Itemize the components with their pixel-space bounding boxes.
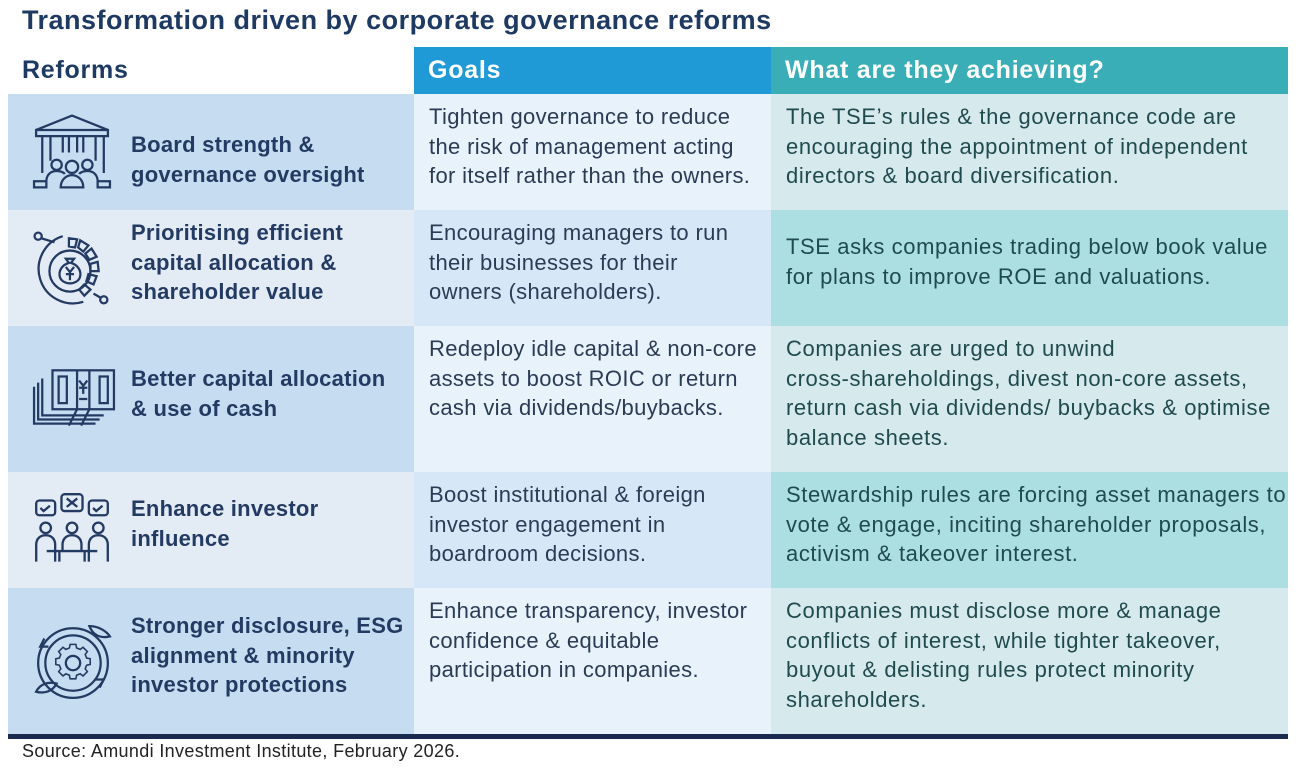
row 4 goals [414, 472, 771, 588]
icon: banknotes [32, 369, 116, 426]
row 1 reform: Board strength & [131, 132, 315, 157]
row 1 goals: Tighten governance to reduce [429, 104, 730, 129]
row 4 achieving: Stewardship rules are forcing asset managers to [786, 482, 1286, 507]
row 1 goals [414, 94, 771, 210]
row 4 reform [8, 472, 414, 588]
row 3 achieving: cross-shareholdings, divest non-core assets, [786, 366, 1248, 390]
header: achieving [771, 47, 1288, 94]
row 3 achieving [771, 326, 1288, 472]
header: achieving: What are they achieving? [785, 56, 1104, 84]
row 3 reform [8, 326, 414, 472]
row 3 achieving: Companies are urged to unwind [786, 336, 1115, 361]
row 4 reform: Enhance investor [131, 496, 318, 521]
row 3 achieving: balance sheets. [786, 424, 949, 450]
row 4 goals: investor engagement in [429, 512, 665, 536]
row 1 achieving [771, 94, 1288, 210]
row 5 achieving: Companies must disclose more & manage [786, 598, 1222, 623]
row 2 achieving: TSE asks companies trading below book value [786, 234, 1268, 259]
icon: institution with people [32, 114, 112, 188]
row 1 goals: the risk of management acting [429, 134, 734, 158]
row 5 reform [8, 588, 414, 734]
icon: capital cycle with yen bag [33, 232, 108, 305]
row 5 goals: participation in companies. [429, 657, 699, 682]
row 3 achieving: return cash via dividends/ buybacks & optimise [786, 395, 1271, 420]
row 5 reform: investor protections [131, 672, 347, 697]
header: goals: Goals [428, 56, 501, 84]
row 1 goals: for itself rather than the owners. [429, 163, 750, 188]
row 2 achieving: for plans to improve ROE and valuations. [786, 264, 1211, 288]
source note: Source: Amundi Investment Institute, February 2026. [22, 741, 460, 761]
row 5 reform: Stronger disclosure, ESG [131, 613, 404, 638]
row 2 achieving [771, 210, 1288, 326]
row 1 reform [8, 94, 414, 210]
row 2 goals: owners (shareholders). [429, 279, 662, 304]
row 4 achieving [771, 472, 1288, 588]
row 1 achieving: directors & board diversification. [786, 163, 1119, 188]
row 1 reform: governance oversight [131, 162, 365, 186]
row 2 goals [414, 210, 771, 326]
row 5 goals [414, 588, 771, 734]
row 3 goals: Redeploy idle capital & non-core [429, 336, 757, 361]
row 1 achieving: The TSE’s rules & the governance code are [786, 104, 1237, 129]
row 5 achieving [771, 588, 1288, 734]
row 2 reform: shareholder value [131, 279, 324, 304]
row 5 achieving: shareholders. [786, 686, 927, 712]
row 4 goals: Boost institutional & foreign [429, 482, 706, 507]
row 5 reform: alignment & minority [131, 642, 355, 668]
icon: investors voting [35, 493, 109, 562]
row 2 reform: capital allocation & [131, 250, 336, 274]
header: reforms: Reforms [22, 56, 129, 84]
row 2 reform [8, 210, 414, 326]
header: goals [414, 47, 771, 94]
row 5 goals: confidence & equitable [429, 628, 659, 652]
row 5 achieving: conflicts of interest, while tighter takeover, [786, 628, 1221, 652]
row 3 reform: & use of cash [131, 396, 277, 420]
row 4 goals: boardroom decisions. [429, 541, 646, 566]
row 4 reform: influence [131, 526, 230, 550]
title: Transformation driven by corporate governance reforms [22, 5, 772, 35]
row 3 goals: cash via dividends/buybacks. [429, 395, 724, 420]
row 5 achieving: buyout & delisting rules protect minority [786, 657, 1195, 682]
row 4 achieving: vote & engage, inciting shareholder proposals, [786, 512, 1266, 536]
row 3 goals: assets to boost ROIC or return [429, 366, 738, 390]
row 3 reform: Better capital allocation [131, 366, 385, 391]
row 2 reform: Prioritising efficient [131, 220, 343, 245]
row 5 goals: Enhance transparency, investor [429, 598, 747, 623]
row 4 achieving: activism & takeover interest. [786, 541, 1078, 566]
row 2 goals: Encouraging managers to run [429, 220, 728, 245]
row 2 goals: their businesses for their [429, 250, 678, 274]
row 3 goals [414, 326, 771, 472]
row 1 achieving: encouraging the appointment of independent [786, 134, 1248, 158]
icon: gear with leaves cycle [34, 625, 112, 699]
